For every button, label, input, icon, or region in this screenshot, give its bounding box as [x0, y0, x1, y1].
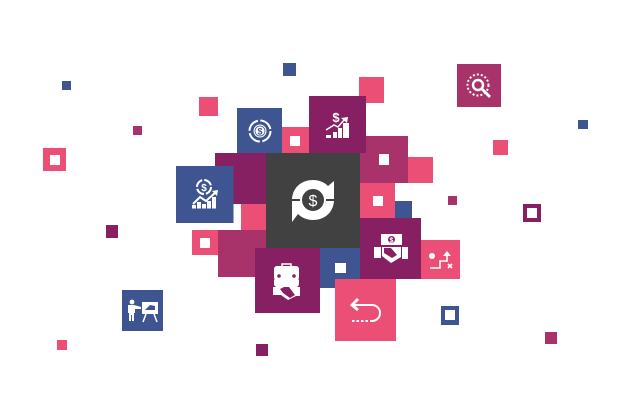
icon: circular arrows with dollar: $ [309, 193, 318, 210]
icon: dollar and rising bars: $ [332, 110, 340, 125]
icon: magnifier in dotted circle [468, 74, 490, 97]
panel: profit growth [309, 96, 366, 153]
icon: dollar cycle over chart: $ [201, 183, 207, 194]
icon: back arrow [352, 299, 380, 321]
icon: person dot and stair arrow [429, 251, 452, 268]
ring square: pink [43, 148, 66, 171]
ring square: purple [523, 204, 541, 222]
icon: briefcase and handshake [272, 264, 301, 300]
panel: central exchange dollar [266, 153, 360, 248]
panel: presentation [122, 290, 163, 331]
icon: banknote and handshake: $ [390, 238, 394, 244]
icon: coin with rotating arrows: $ [257, 126, 263, 136]
panel: recurring revenue [237, 108, 282, 153]
panel: deal handshake money [360, 218, 421, 279]
ring square: blue [441, 306, 459, 325]
panel: partnership briefcase [255, 248, 320, 313]
scattered decorative squares [57, 63, 588, 356]
panel: return arrow [335, 279, 396, 341]
panel: growth exchange [176, 166, 234, 223]
panel: search analysis [457, 64, 501, 107]
icon: presenter at board [128, 300, 158, 322]
backing blocks of the cluster [192, 127, 433, 288]
panel: career steps [421, 240, 460, 279]
